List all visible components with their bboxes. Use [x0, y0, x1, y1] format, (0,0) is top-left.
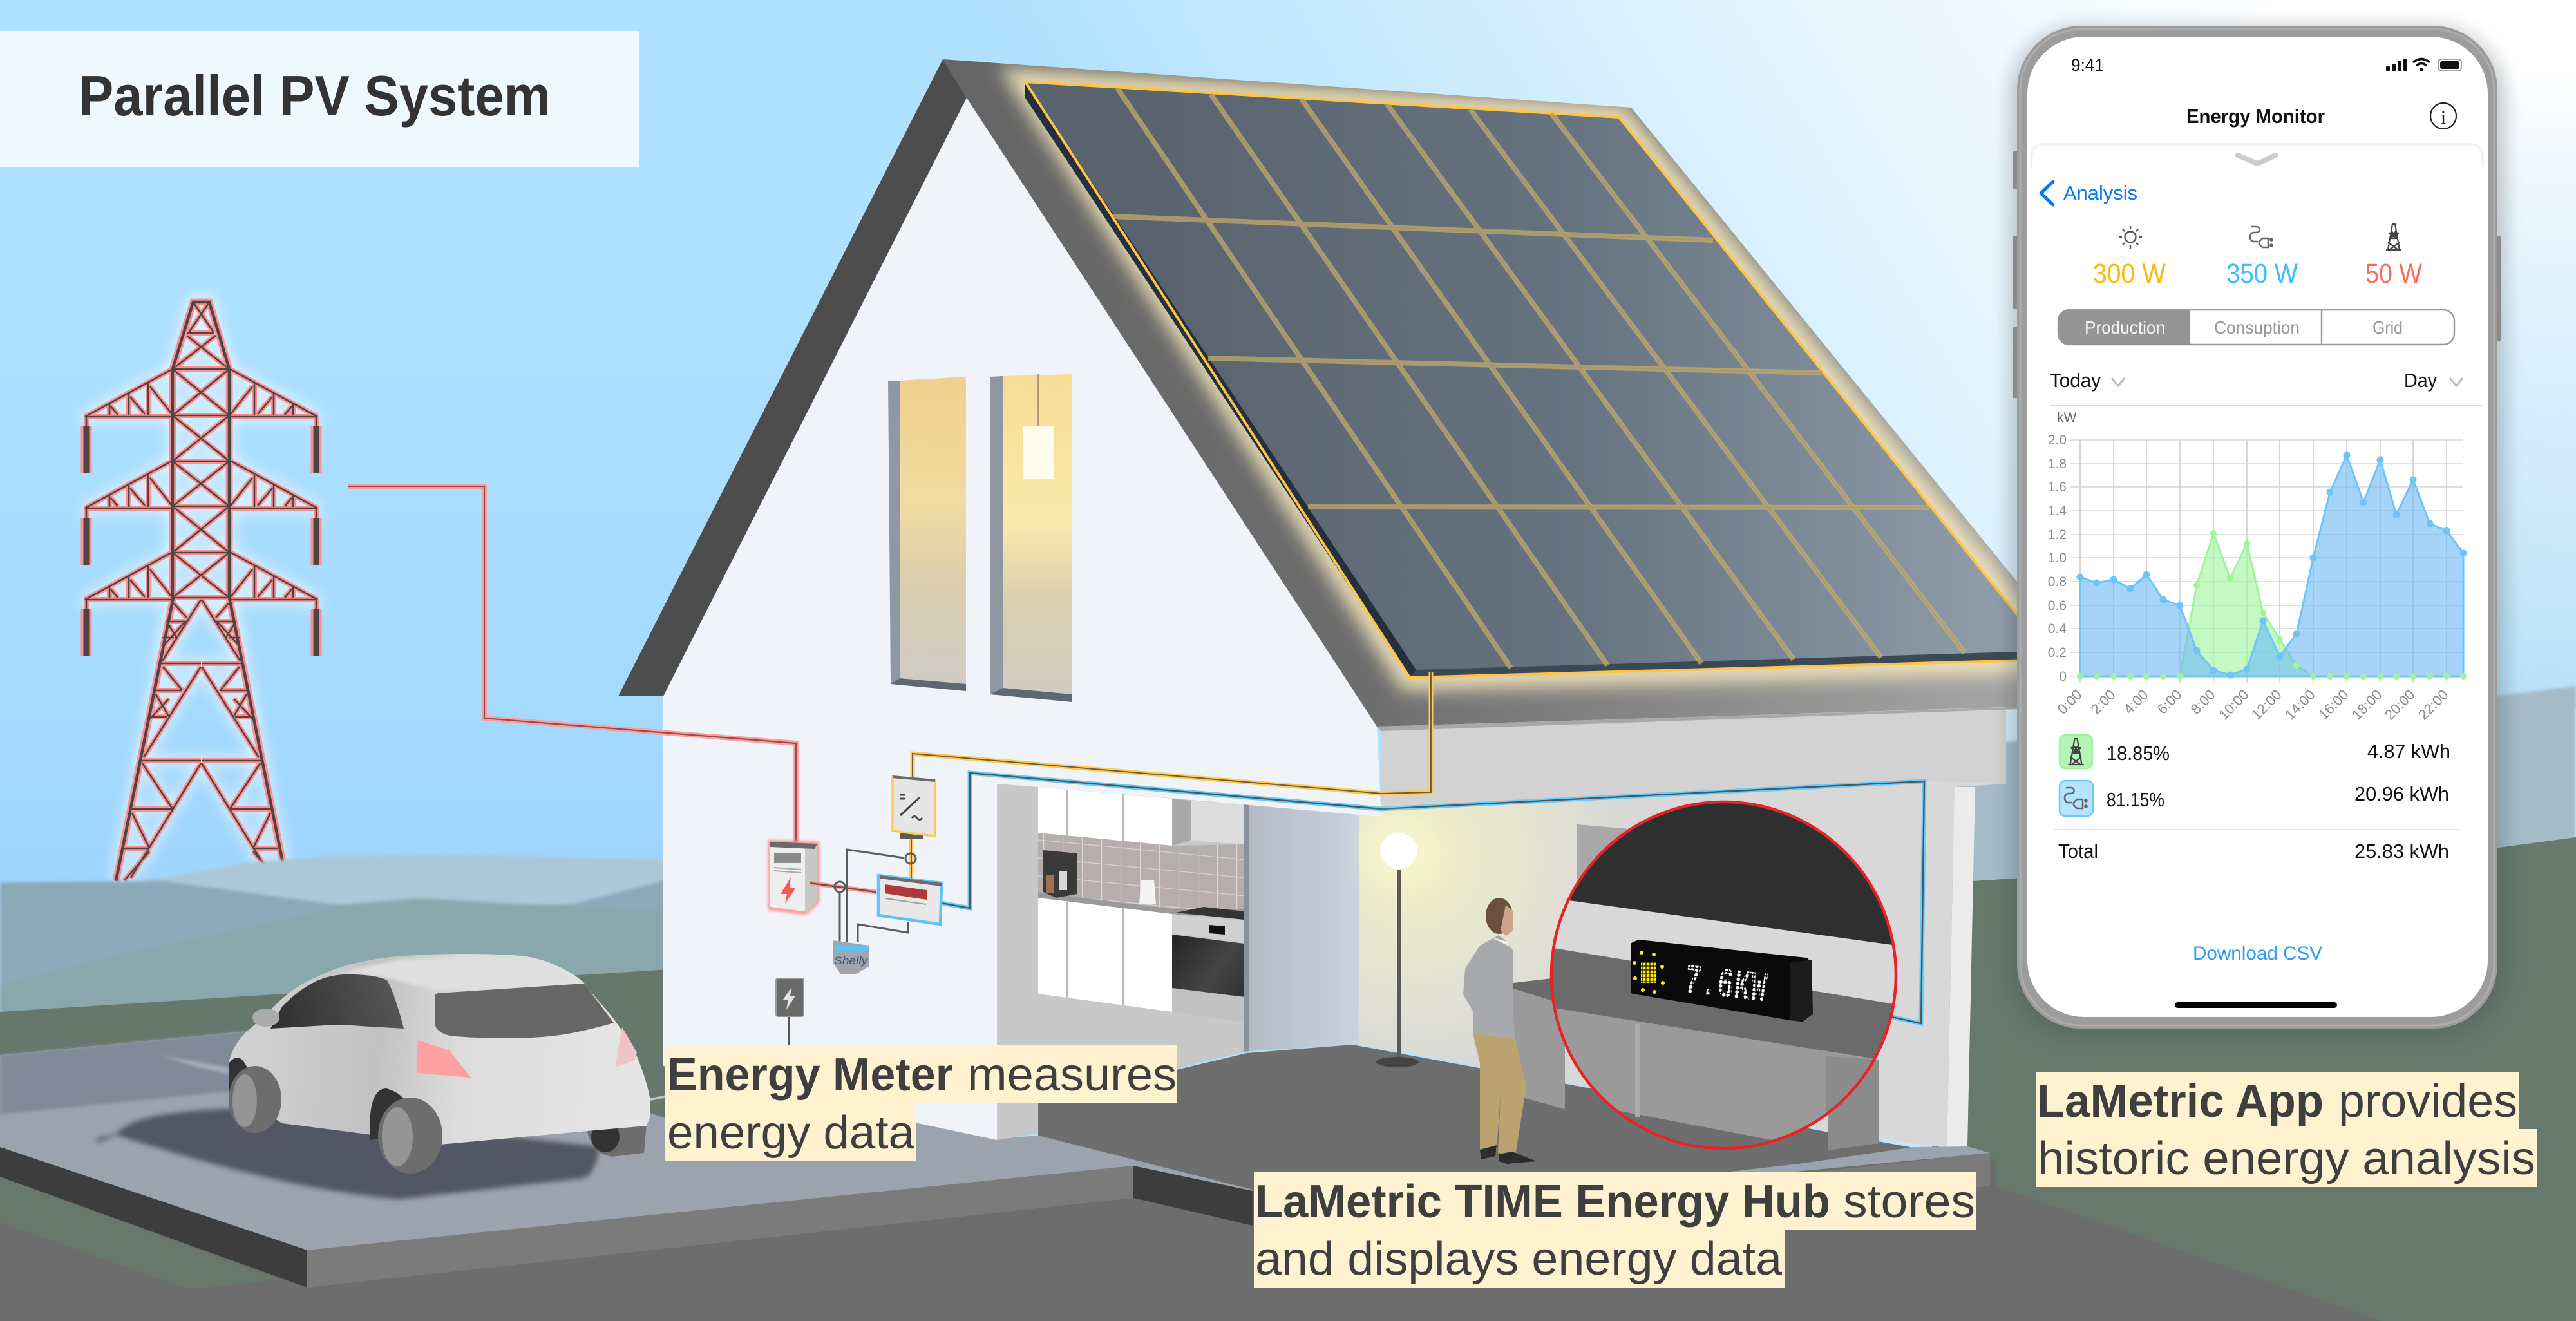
interior floor: [1038, 1045, 1946, 1226]
total row: [2054, 830, 2460, 862]
kitchen: [1038, 787, 1244, 1022]
legend row: grid share: 4.87 kWh: [2367, 740, 2450, 763]
car body: [229, 954, 650, 1146]
windows: [888, 374, 1072, 702]
x axis labels: 20:00: [2382, 687, 2418, 723]
tail lights: [417, 1040, 471, 1078]
title: Parallel PV System: [79, 64, 551, 128]
shoes: [1480, 1145, 1537, 1164]
house roof: [618, 59, 2017, 727]
segmented control: Consuption: [2214, 318, 2300, 337]
x axis labels: 12:00: [2248, 687, 2285, 723]
icon: red bolt: [781, 877, 796, 904]
ground and driveway: [0, 1021, 2381, 1321]
caption: LaMetric TIME Energy Hub: and displays energy data: [1255, 1233, 1783, 1285]
person: [1463, 898, 1537, 1164]
device: inverter: [893, 775, 935, 839]
date selectors: Day: [2404, 369, 2437, 392]
device: energy meter: [770, 842, 817, 913]
x axis labels: 18:00: [2349, 687, 2385, 723]
floor lamp: [1360, 812, 1437, 1067]
date selectors: Today: [2050, 369, 2101, 392]
y axis labels: 0.6: [2048, 598, 2067, 613]
car shadow: [97, 1108, 599, 1199]
device: Shelly energy meter: Shelly: [834, 955, 869, 967]
legend row: grid share: [2060, 735, 2450, 768]
front step strip: [1253, 1146, 1990, 1227]
roof highlight: [325, 958, 576, 991]
caption: LaMetric App: [2036, 1072, 2537, 1187]
x axis labels: 2:00: [2088, 687, 2119, 718]
total row: 25.83 kWh: [2354, 840, 2449, 862]
caption: energy meter: Energy Meter: [667, 1049, 953, 1101]
pendant lamp: [1023, 374, 1054, 479]
caption: energy meter: [665, 1045, 1177, 1161]
icon: electricity pylon: [85, 302, 317, 881]
y axis labels: 1.8: [2048, 457, 2067, 471]
caption: LaMetric App: historic energy analysis: [2038, 1133, 2535, 1184]
legend row: solar share: 81.15%: [2107, 788, 2164, 811]
app header: Energy Monitor: [2186, 105, 2325, 128]
x axis labels: 8:00: [2188, 687, 2219, 718]
segmented control: Production: [2085, 318, 2165, 337]
wiring: PV yellow line: [911, 672, 1431, 880]
sun icon: [1633, 951, 1665, 994]
area chart: hourly power: kW: [2057, 410, 2076, 425]
side window: [270, 974, 404, 1029]
x axis labels: 4:00: [2121, 687, 2152, 718]
home indicator: [2175, 1002, 2337, 1008]
x axis labels: 22:00: [2415, 687, 2452, 723]
caption: energy meter: energy data: [667, 1107, 915, 1159]
y axis labels: 1.4: [2048, 504, 2067, 518]
wheel: rear left: [370, 1088, 442, 1174]
segmented control: Grid: [2372, 318, 2403, 337]
stove and oven: [1172, 907, 1244, 1022]
wiring: house blue line: [938, 773, 1924, 1023]
wiring: grid to meter: [348, 486, 796, 842]
stat: grid: 50 W: [2365, 258, 2422, 289]
caption: energy meter: measures: [967, 1049, 1177, 1101]
stat: grid: [2365, 224, 2422, 289]
display reading: 7.6KW: [1682, 957, 1770, 1014]
car: [229, 954, 667, 1174]
legend row: grid share: 18.85%: [2107, 742, 2170, 765]
stat: production: 300 W: [2093, 258, 2166, 289]
mirror: [252, 1009, 279, 1027]
x axis labels: 16:00: [2315, 687, 2352, 723]
caption: LaMetric TIME Energy Hub: [1254, 1172, 1976, 1288]
trousers: [1473, 1033, 1526, 1155]
solar production series: [2080, 455, 2463, 676]
house wall: [663, 98, 2017, 1148]
x axis labels: 14:00: [2282, 687, 2318, 723]
wheel: rear right: [586, 1121, 647, 1157]
legend row: solar share: [2060, 781, 2449, 816]
y axis labels: 0.8: [2048, 575, 2067, 589]
x axis labels: 0:00: [2054, 687, 2085, 718]
area chart: hourly power: [2048, 410, 2463, 723]
icon: plug: [2250, 227, 2273, 247]
status bar: 9:41: [2071, 55, 2104, 75]
title: [0, 31, 639, 167]
status bar: [2071, 55, 2461, 75]
beam above the interior: [1381, 709, 2006, 810]
app header: [2186, 103, 2456, 129]
device: EV charger: [776, 978, 804, 1046]
left roof edge: [618, 59, 967, 696]
phone mockup: [2009, 26, 2505, 1037]
y axis labels: 0.4: [2048, 622, 2067, 636]
panel frames: [1113, 88, 1965, 668]
grid import markers: [2080, 533, 2463, 676]
LaMetric TIME device: [1633, 942, 1813, 1022]
icon: info: i: [2441, 107, 2446, 128]
caption: LaMetric App: provides: [2338, 1076, 2517, 1127]
y axis labels: 0: [2059, 669, 2067, 684]
total row: Total: [2058, 840, 2098, 862]
callout: magnified LaMetric TIME circle: [1546, 799, 1906, 1159]
background hills: [0, 686, 2576, 1321]
sheet top edge: [2031, 144, 2483, 167]
sideboard behind the person: [1513, 824, 1879, 1150]
y axis labels: 1.2: [2048, 527, 2067, 542]
y axis labels: 0.2: [2048, 645, 2067, 660]
sweater: [1463, 935, 1515, 1039]
caption: LaMetric TIME Energy Hub: LaMetric TIME Energy Hub: [1255, 1176, 1830, 1228]
y axis labels: 1.0: [2048, 551, 2067, 565]
kettle: [1139, 880, 1156, 904]
solar panel array: [1024, 82, 2053, 678]
collar: [1491, 937, 1510, 947]
icon: sun: [2119, 226, 2142, 249]
icon: info: [2430, 103, 2456, 129]
device: distribution board: [878, 875, 942, 924]
phone side buttons: [2013, 151, 2501, 398]
legend row: solar share: 20.96 kWh: [2354, 783, 2449, 805]
rear window: [435, 984, 614, 1038]
date selectors: [2050, 369, 2483, 406]
coffee machine: [1043, 850, 1077, 898]
wheel: front left: [229, 1058, 281, 1133]
head: [1486, 898, 1513, 934]
stat: consumption: [2226, 227, 2298, 289]
device: Shelly energy meter: [833, 940, 869, 974]
download link: Download CSV: [2193, 943, 2322, 964]
segmented control: [2058, 310, 2454, 345]
icon: pylon: [2386, 224, 2401, 250]
y axis labels: [2048, 433, 2067, 684]
caption: LaMetric TIME Energy Hub: stores: [1843, 1176, 1975, 1228]
caption: LaMetric App: LaMetric App: [2037, 1076, 2324, 1127]
y axis labels: 2.0: [2048, 433, 2067, 448]
grid import series: [2080, 533, 2463, 676]
stat: production: [2093, 226, 2166, 289]
x axis labels: [2054, 687, 2452, 723]
stat: consumption: 350 W: [2226, 258, 2298, 289]
wiring: meter to board with clamps: [810, 850, 916, 942]
x axis labels: 10:00: [2215, 687, 2252, 723]
back link: Analysis: [2063, 182, 2137, 204]
x axis labels: 6:00: [2154, 687, 2185, 718]
y axis labels: 1.6: [2048, 480, 2067, 495]
